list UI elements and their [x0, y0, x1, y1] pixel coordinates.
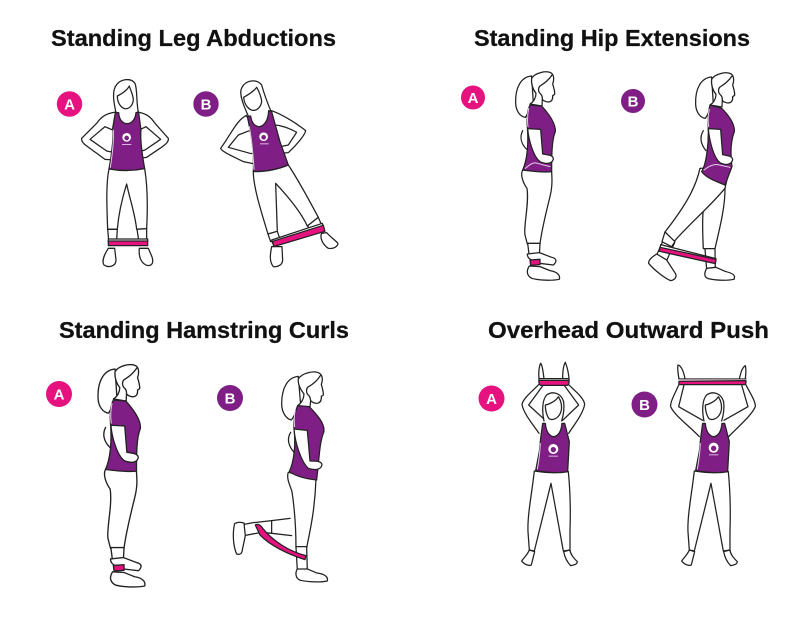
badge: overhead push B: B	[639, 397, 650, 414]
badge: hamstring curls A: A	[54, 386, 65, 404]
badge: hip extensions A: A	[468, 90, 479, 107]
badge: hamstring curls B	[217, 385, 243, 411]
title: Standing Leg Abductions: Standing Leg Abductions	[51, 25, 336, 51]
figure: leg abductions position A	[82, 80, 168, 266]
badge: hamstring curls A	[46, 381, 72, 407]
badge: hip extensions B: B	[628, 94, 639, 110]
figure: hip extensions position B	[649, 73, 735, 281]
badge: leg abductions B: B	[201, 96, 212, 114]
badge: overhead push A: A	[486, 391, 497, 408]
title: Standing Hip Extensions: Standing Hip Extensions	[474, 25, 750, 51]
badge: leg abductions A	[57, 91, 82, 117]
figure: leg abductions position B	[221, 81, 338, 267]
figure: hip extensions position A	[516, 72, 560, 280]
title: Overhead Outward Push: Overhead Outward Push	[488, 317, 769, 343]
badge: leg abductions A: A	[64, 96, 75, 114]
figure: hamstring curls position A	[98, 365, 145, 587]
badge: hip extensions A	[461, 86, 485, 110]
badge: leg abductions B	[193, 91, 219, 117]
badge: overhead push B	[632, 392, 658, 418]
title: Standing Hamstring Curls: Standing Hamstring Curls	[59, 317, 349, 343]
figure: hamstring curls position B	[233, 372, 328, 582]
badge: hip extensions B	[621, 89, 645, 113]
figure: overhead push position A	[522, 362, 585, 566]
badge: overhead push A	[478, 386, 504, 412]
badge: hamstring curls B: B	[225, 390, 236, 408]
figure: overhead push position B	[671, 365, 755, 566]
